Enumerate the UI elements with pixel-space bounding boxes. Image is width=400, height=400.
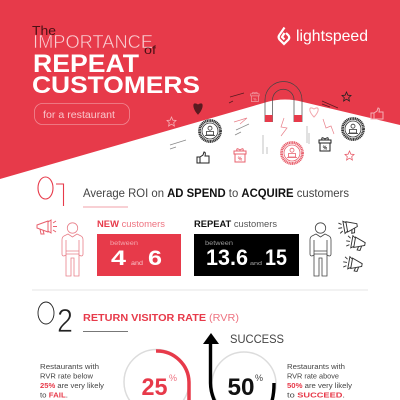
- panel: repeat customers: 15: [265, 245, 287, 270]
- icon: star light left: [167, 117, 176, 126]
- arrow head: [203, 333, 219, 344]
- text block: succeed: RVR rate above: [287, 372, 339, 380]
- chart: 25% gauge: [124, 350, 189, 400]
- title: of: [144, 43, 157, 57]
- red header background: [0, 0, 400, 179]
- icon: badge dark left: [200, 120, 220, 142]
- panel: repeat customers: REPEAT customers: [194, 219, 278, 229]
- title: [32, 24, 200, 99]
- title: REPEAT: [33, 50, 139, 78]
- icon: gift red top: [251, 92, 259, 102]
- icon: magnet: [265, 82, 302, 122]
- panel: new customers: 4: [111, 246, 126, 270]
- illustration: magnet and loyalty icons: [167, 82, 383, 164]
- panel: new customers: between: [110, 241, 138, 247]
- icon: megaphone dark 2: [345, 235, 366, 251]
- panel: new customers: NEW customers: [97, 219, 166, 229]
- title: The: [32, 24, 56, 38]
- chart: 50% gauge with arrow: %: [255, 373, 263, 383]
- icon: person dark: [310, 223, 331, 276]
- text block: succeed: 50% are very likely: [287, 381, 352, 390]
- title: IMPORTANCE: [33, 32, 153, 52]
- motion lines and sparks: [170, 93, 338, 154]
- icon: thumb light: [371, 108, 383, 119]
- section 1 heading: Average ROI on AD SPEND to ACQUIRE customers: [83, 188, 349, 200]
- subtitle pill: for a restaurant: [34, 104, 130, 124]
- icon: person red: [62, 223, 83, 276]
- panel: new customers: and: [131, 261, 143, 267]
- logo: lightspeed: lightspeed: [296, 28, 368, 45]
- title: CUSTOMERS: [32, 72, 200, 99]
- chart: 50% gauge with arrow: [203, 333, 276, 400]
- icon: thumb dark: [197, 152, 209, 163]
- text block: fail: RVR rate below: [40, 372, 94, 380]
- section 1 number: [38, 177, 64, 206]
- icon: megaphone dark 3: [342, 256, 363, 272]
- icon: heart dark: [194, 104, 202, 114]
- panel: new customers: 6: [148, 246, 162, 270]
- icon: star dark: [342, 92, 351, 101]
- text block: fail: to FAIL.: [40, 390, 68, 400]
- panel: repeat customers: and: [250, 261, 262, 267]
- subtitle pill: for a restaurant: for a restaurant: [43, 110, 115, 121]
- chart: 25% gauge: %: [169, 373, 177, 383]
- text block: succeed: to SUCCEED .: [287, 390, 345, 400]
- icon: heart light: [310, 108, 318, 117]
- icon: badge red centre: [282, 142, 302, 164]
- text block: fail: 25% are very likely: [40, 381, 104, 390]
- text block: succeed: [287, 362, 352, 400]
- label: success: SUCCESS: [230, 332, 284, 346]
- panel: repeat customers: 13.6: [206, 245, 248, 270]
- text block: succeed: Restaurants with: [287, 362, 345, 371]
- icon: megaphone dark 1: [337, 219, 358, 235]
- panel: repeat customers: [194, 219, 299, 276]
- icon: star red: [345, 151, 354, 160]
- icon: badge dark right: [342, 118, 364, 140]
- section 2 number: 2: [57, 302, 73, 339]
- icon: megaphone red: [37, 220, 57, 234]
- section 2 heading: RETURN VISITOR RATE (RVR): [83, 312, 239, 324]
- text block: fail: Restaurants with: [40, 362, 99, 371]
- icon: gift dark: [319, 138, 331, 152]
- panel: new customers: [97, 219, 181, 276]
- text block: fail: [40, 362, 104, 400]
- icon: gift red bottom: [234, 149, 246, 162]
- panel: repeat customers: between: [205, 241, 233, 247]
- section 2 number: [38, 302, 73, 339]
